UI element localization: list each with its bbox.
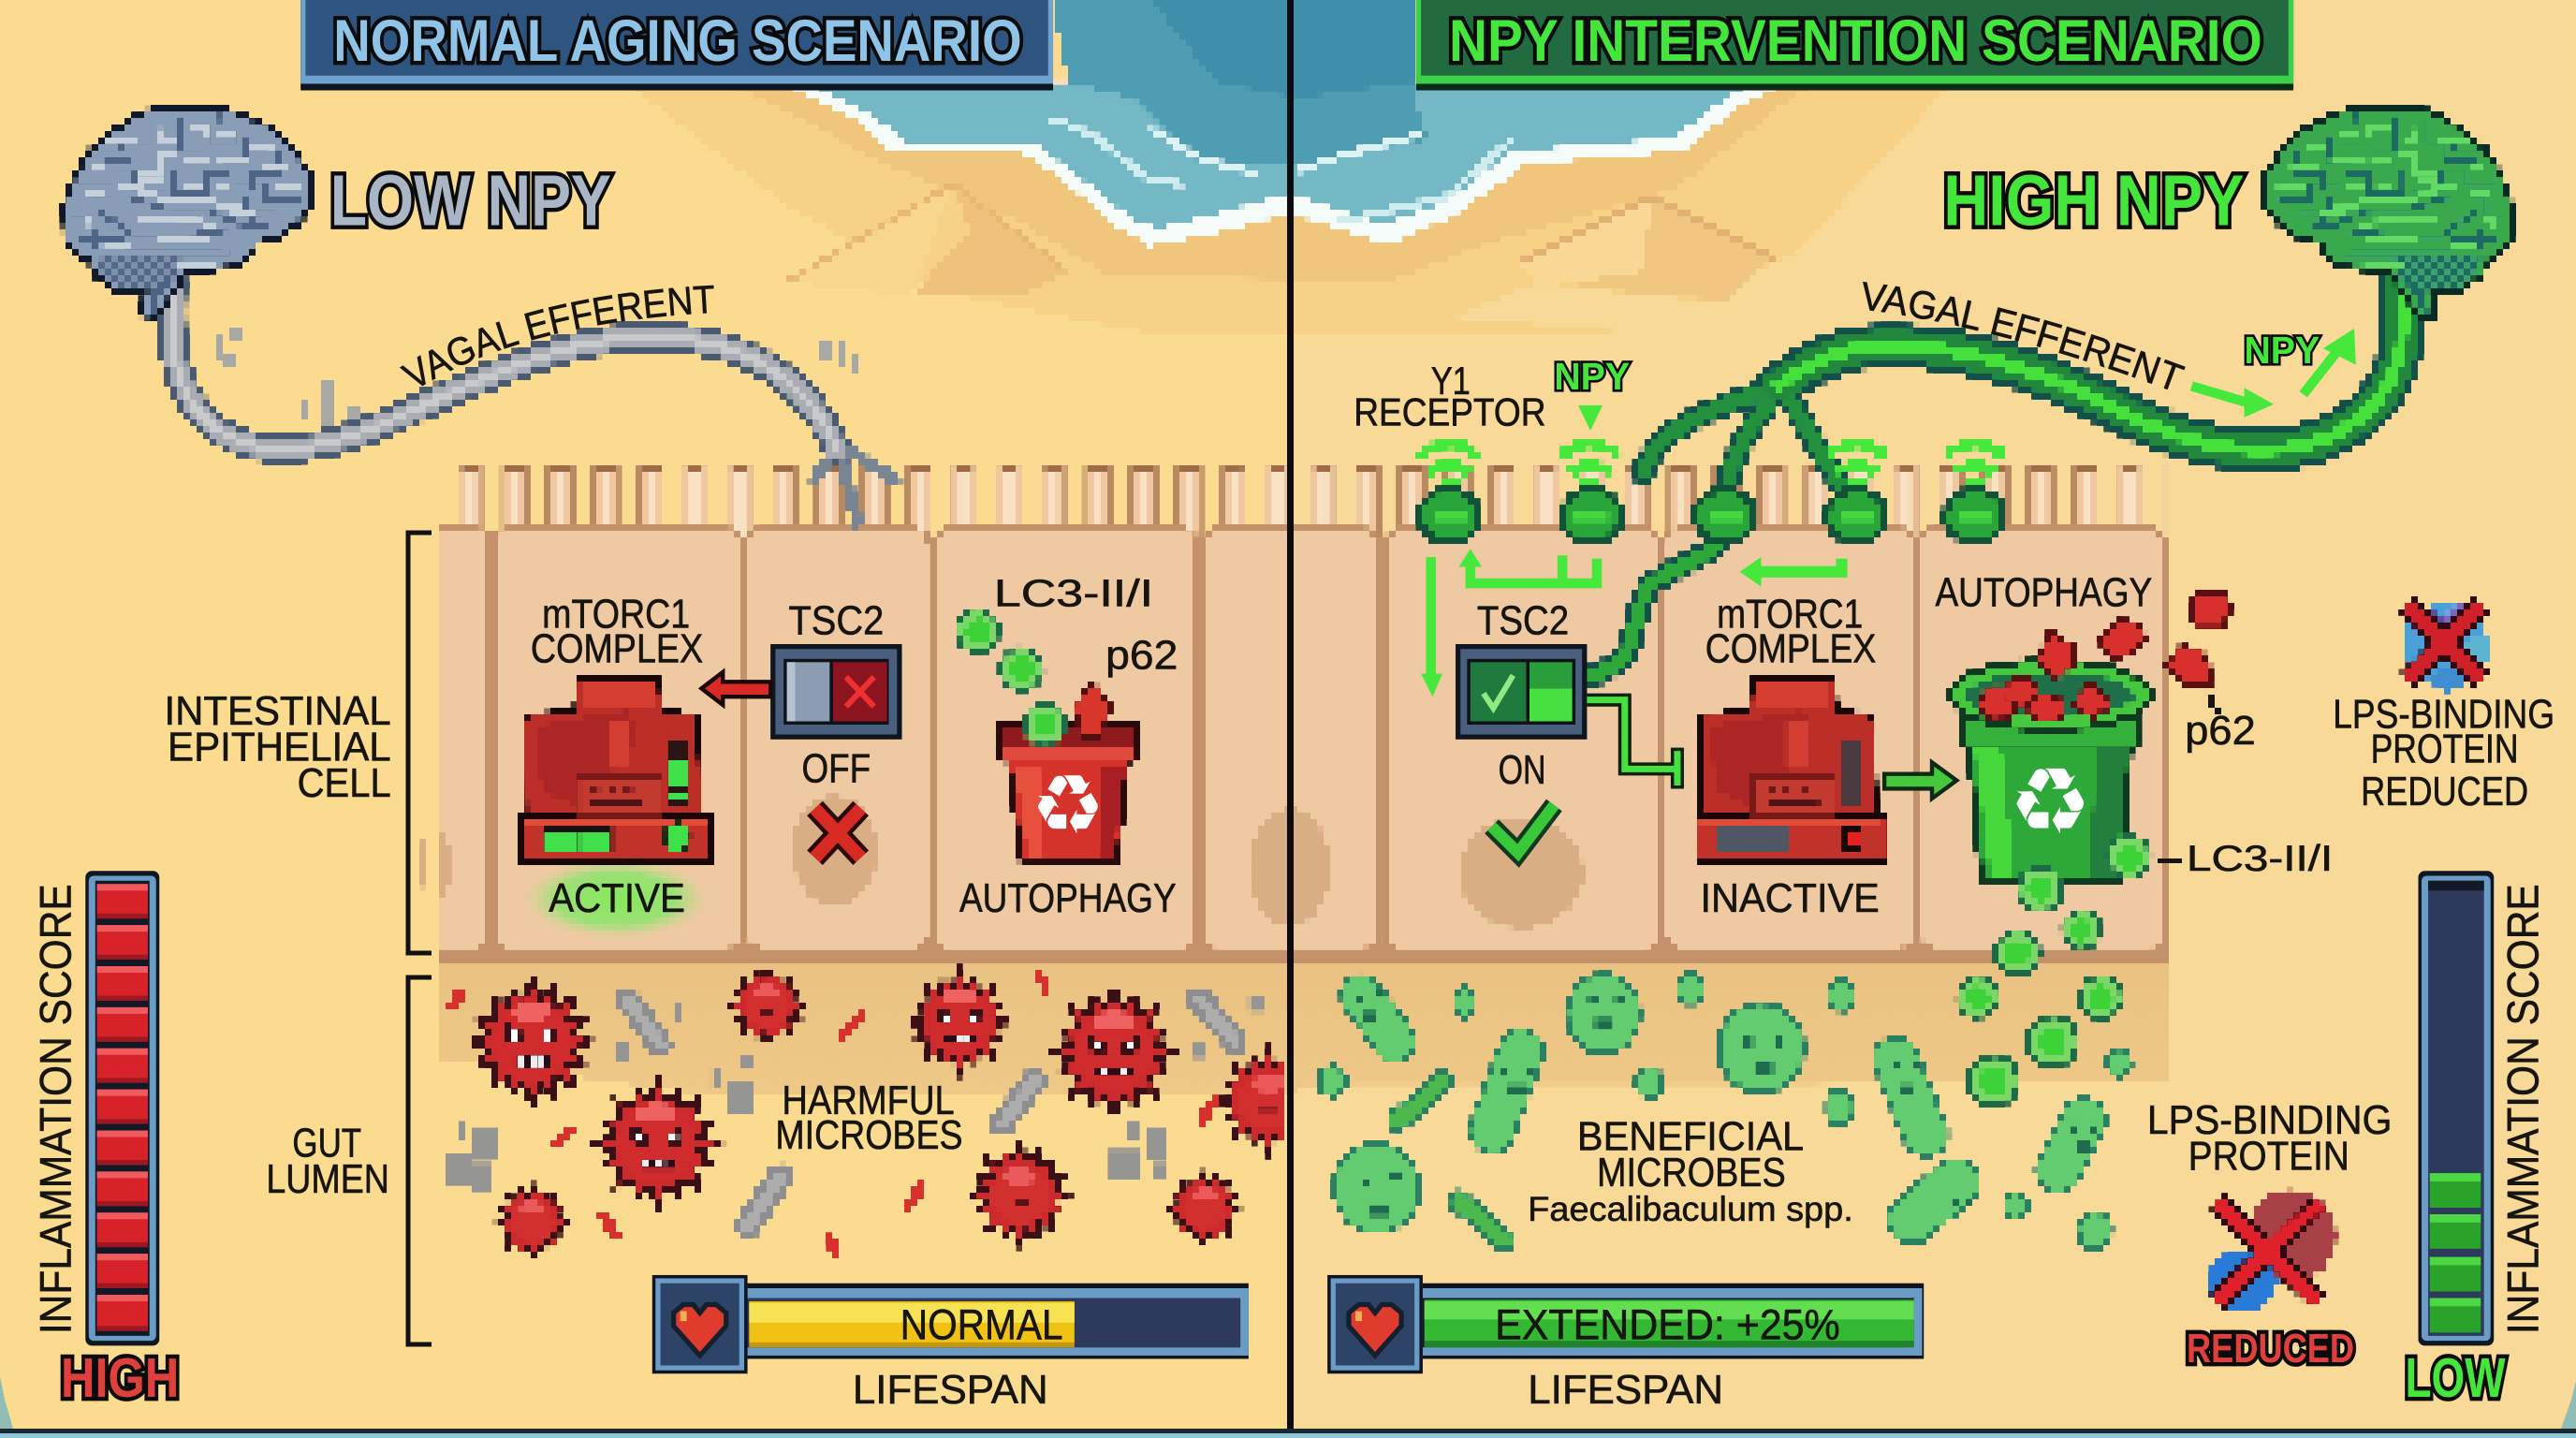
- arrows: NPY flow along nerve: [2191, 329, 2356, 418]
- bottom frame band: [0, 1376, 2576, 1438]
- virus cluster: [472, 978, 593, 1106]
- red meter segments: [97, 884, 148, 1331]
- outlined rods: [1362, 996, 2083, 1240]
- panel: left cell contents: [522, 572, 1178, 938]
- label: LPS-binding protein (bottom): LPS-BINDING: [2147, 1097, 2392, 1143]
- left lifespan bar: [652, 1275, 1249, 1373]
- label: harmful microbes: HARMFUL: [782, 1078, 955, 1123]
- label: mTORC1 complex: COMPLEX: [531, 625, 703, 671]
- green fill: [1425, 1299, 1914, 1347]
- icon: recycle symbol red bin: ♻: [1031, 757, 1105, 853]
- panel: right cell contents: [1421, 549, 2333, 1108]
- label: intestinal epithelial cell: EPITHELIAL: [168, 725, 391, 770]
- icon: crossed LPS-binding protein (top): [2402, 605, 2491, 692]
- icon: red autophagy bin: [955, 608, 1135, 862]
- label: extended +25%: EXTENDED: +25%: [1495, 1300, 1840, 1348]
- label: Y1 receptor: RECEPTOR: [1354, 390, 1546, 434]
- arrow: NPY down to receptor: [1578, 405, 1603, 431]
- label: mTORC1 complex right: mTORC1: [1717, 591, 1863, 637]
- Y1 receptors with signal waves: [1419, 444, 2004, 542]
- label: TSC2 right: TSC2: [1477, 597, 1569, 643]
- label: inflammation score (left): INFLAMMATION SCORE: [31, 884, 80, 1334]
- icon: green autophagy bin with red p62: [1950, 592, 2231, 1108]
- right lifespan bar: [1327, 1275, 1924, 1373]
- label: beneficial microbes: MICROBES: [1597, 1150, 1786, 1196]
- label: gut lumen: LUMEN: [266, 1156, 389, 1202]
- icon: mTORC1 active machine: [522, 677, 711, 938]
- label: NPY above receptor: NPY: [1554, 355, 1630, 398]
- icon: TSC2 switch on: [1456, 644, 1587, 740]
- beneficial microbes: [1319, 975, 2130, 1249]
- yellow fill: [749, 1301, 1075, 1344]
- label: vagal efferent (right): VAGAL EFFERENT: [1863, 281, 2186, 389]
- right inflammation meter: [2419, 871, 2494, 1345]
- grey particles: [446, 996, 1262, 1190]
- icon: TSC2 switch off: [770, 644, 902, 740]
- LC3 leader line: [2158, 858, 2182, 863]
- title: NPY intervention scenario: [1416, 0, 2293, 91]
- label: high NPY: HIGH NPY: [1943, 160, 2244, 241]
- label: beneficial microbes: Faecalibaculum spp.: [1528, 1190, 1853, 1228]
- label: inactive: INACTIVE: [1701, 875, 1880, 921]
- epithelium: microvilli and intestinal cells: [419, 463, 2169, 1093]
- label: autophagy right: AUTOPHAGY: [1936, 570, 2152, 616]
- arrow: mTORC1 to autophagy: [1884, 762, 1956, 799]
- label: mTORC1 complex right: COMPLEX: [1705, 625, 1876, 671]
- icon: green check: [1492, 805, 1554, 853]
- title: NPY intervention scenario: NPY INTERVENTION SCENARIO: [1449, 8, 2262, 74]
- title: normal aging scenario: NORMAL AGING SCENARIO: [333, 8, 1022, 74]
- icon: crossed LPS-binding protein (bottom): [2208, 1190, 2336, 1313]
- label: LC3-II/I right with leader: LC3-II/I: [2187, 839, 2333, 879]
- label: lifespan (right): LIFESPAN: [1528, 1367, 1723, 1413]
- title: normal aging scenario: [300, 0, 1053, 91]
- grey bacteria: [627, 999, 1236, 1225]
- heart box: [1327, 1275, 1423, 1373]
- left nerve: low-activity vagal efferent: [171, 283, 896, 522]
- harmful microbes: [446, 966, 1317, 1258]
- label: on: ON: [1499, 747, 1546, 793]
- label: vagal efferent (left): VAGAL EFFERENT: [400, 285, 714, 386]
- label: mTORC1 complex: mTORC1: [542, 591, 690, 637]
- label: autophagy: AUTOPHAGY: [959, 875, 1177, 921]
- label: Y1 receptor: Y1: [1431, 359, 1471, 403]
- label: normal: NORMAL: [900, 1300, 1063, 1348]
- label: low NPY: LOW NPY: [330, 160, 611, 241]
- label: beneficial microbes: BENEFICIAL: [1577, 1114, 1804, 1160]
- label: high: HIGH: [61, 1346, 179, 1409]
- faces: [1355, 990, 2100, 1216]
- round microbes: [1319, 975, 2130, 1249]
- arrow: switch to mTORC1: [701, 672, 770, 705]
- icon: heart: [1349, 1305, 1401, 1356]
- icon: grey brain: [64, 108, 311, 321]
- icon: heart: [674, 1305, 726, 1356]
- label: reduced: REDUCED: [2187, 1326, 2354, 1372]
- inhibition line to mTORC1: [1587, 700, 1677, 788]
- label: p62: p62: [1105, 632, 1178, 678]
- label: NPY near nerve: NPY: [2244, 329, 2320, 372]
- label: LPS-binding protein (bottom): PROTEIN: [2188, 1134, 2349, 1180]
- label: LC3-II/I: LC3-II/I: [994, 572, 1153, 615]
- label: active: ACTIVE: [549, 875, 685, 921]
- arrows: green signalling path: [1421, 549, 1841, 697]
- icon: red X: [815, 809, 861, 858]
- vertical divider between scenarios: [1287, 0, 1294, 1429]
- heart box: [652, 1275, 748, 1373]
- label: gut lumen: GUT: [292, 1121, 361, 1167]
- label: TSC2: TSC2: [788, 597, 884, 643]
- icon: green brain: [2265, 108, 2512, 321]
- label: LPS-binding protein reduced (top): REDUCED: [2361, 769, 2528, 814]
- right nerve: active vagal efferent with branches: [1590, 276, 2403, 677]
- label: intestinal epithelial cell: INTESTINAL: [165, 688, 391, 734]
- label: off: OFF: [801, 745, 871, 791]
- label: low: LOW: [2405, 1346, 2506, 1409]
- left inflammation meter: [85, 871, 159, 1345]
- red fragments: [450, 973, 1216, 1255]
- green meter segments: [2430, 1173, 2481, 1332]
- label: inflammation score (right): INFLAMMATION SCORE: [2499, 884, 2549, 1334]
- label: p62 right: p62: [2185, 708, 2256, 754]
- label: harmful microbes: MICROBES: [775, 1112, 962, 1158]
- icon: recycle symbol green bin: ♻: [2009, 749, 2091, 856]
- label: lifespan (left): LIFESPAN: [853, 1367, 1048, 1413]
- label: intestinal epithelial cell: CELL: [298, 760, 391, 806]
- bracket: gut lumen: [408, 977, 432, 1344]
- bracket: intestinal epithelial cell: [408, 533, 432, 953]
- icon: mTORC1 inactive machine: [1697, 677, 1886, 862]
- label: LPS-binding protein reduced (top): PROTEIN: [2371, 726, 2519, 771]
